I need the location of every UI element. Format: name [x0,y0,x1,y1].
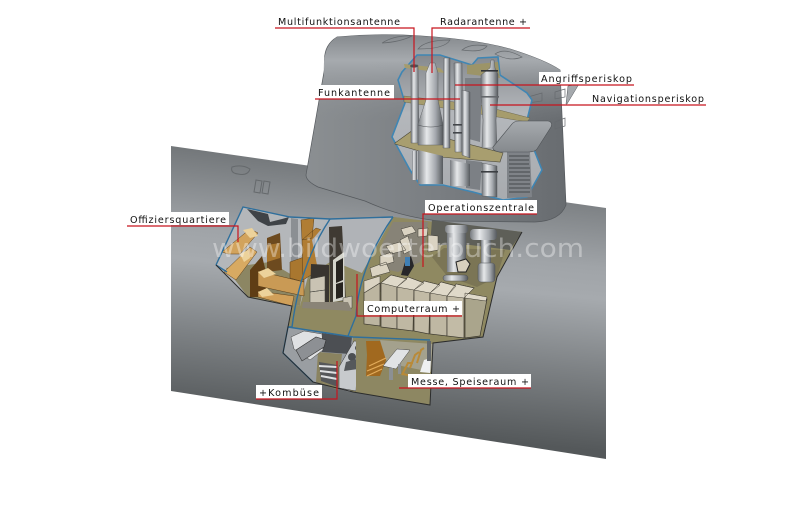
lower bunk [224,247,257,280]
quarters partition [291,218,298,264]
upper aft deck [467,62,500,78]
mess chairs [402,348,424,376]
desk [258,271,304,296]
label: Angriffsperiskop: Angriffsperiskop [541,74,632,85]
label: Messe, Speiseraum: Messe, Speiseraum + [411,377,529,388]
hull cutaway interior [216,207,522,405]
control room floor [350,217,522,337]
upper deck [404,64,445,73]
mess table [383,349,410,369]
quarters floor [226,262,304,306]
mess column and light table [420,358,431,373]
bunk pillows [240,228,258,262]
sofa [250,256,266,297]
cutaway base [216,207,522,405]
tower cutaway [392,55,542,200]
main deck [395,130,503,162]
large periscope base [447,226,466,272]
label: Operationszentrale [423,200,537,267]
label: Multifunktionsantenne [275,17,414,72]
label: Computerraum [357,274,462,316]
rack cabinet [310,264,329,304]
label: Operationszentrale: Operationszentrale [428,203,534,214]
wood stairs [366,341,386,376]
panel: control room [350,217,522,338]
hull deck markings [232,166,270,194]
mess back wall [380,340,433,372]
console group [380,222,428,272]
blue pressure hull frames [216,207,430,382]
aisle back wall [312,217,393,273]
panel: officers quarters [216,207,330,306]
consoles: cream boxes [364,226,438,293]
lower radar cylinder [418,150,443,184]
panel: galley [283,327,371,392]
quarters walls [216,207,330,306]
conning tower [306,35,579,222]
upper bunks [222,229,258,254]
middle deck [404,96,530,122]
label: Multifunktionsantenne: Multifunktionsantenne [278,17,400,28]
aft panels [465,78,482,190]
tower shell [306,35,566,222]
navigation periscope [481,60,498,148]
operator seat [401,256,414,276]
label: Funkantenne: Funkantenne [318,88,390,99]
cutaway background [392,55,542,200]
galley side wall [283,327,353,392]
periscope lower section [482,163,497,197]
second periscope stem [481,240,491,264]
label: Radarantenne: Radarantenne + [440,17,527,28]
label: Navigationsperiskop: Navigationsperiskop [592,94,704,105]
dark equipment rack [329,226,346,302]
periscope box [456,259,470,272]
label: Funkantenne [315,85,460,99]
label: Kombüse: +Kombüse [259,388,319,399]
watermark: www.bildwoerterbuch.com [212,234,584,264]
label: Navigationsperiskop [490,92,706,105]
rack boxes [310,276,352,309]
computer cabinets [364,275,487,338]
label: Computerraum: Computerraum + [367,304,460,315]
label: Radarantenne [432,17,530,73]
panel: mess [356,338,433,405]
bridge fin [493,121,552,152]
galley floor [316,352,342,390]
ribbed hoist [507,152,532,198]
vent fin at tower side [566,84,579,104]
dark hull cut edge [216,232,522,405]
multifunction antenna mast [411,65,419,143]
aft mast [462,90,470,158]
tower roof highlight [316,35,562,120]
side cabinets [290,257,304,282]
panel: computer aisle [292,217,393,336]
dark rear bulkhead [430,220,522,250]
attack periscope [454,63,463,152]
second periscope head [470,229,497,240]
raised platform [432,248,505,287]
stove counter [339,341,371,391]
aisle floor [292,300,356,336]
mess room [356,338,433,405]
papers [258,268,276,297]
wardrobe [267,233,282,272]
galley units [291,331,323,360]
submarine hull [171,146,606,459]
second periscope base [478,263,495,282]
label: Offiziersquartiere [127,212,238,242]
rack base [302,302,352,311]
galley dark back wall [322,333,352,354]
roof panel lines [382,36,565,129]
label: Angriffsperiskop [455,72,634,85]
radio antenna mast [443,58,450,148]
radar antenna cone [418,63,443,145]
cabinet tops [381,275,487,301]
galley steps [319,362,338,387]
label: Kombüse [256,361,337,399]
label: Offiziersquartiere: Offiziersquartiere [130,215,226,226]
